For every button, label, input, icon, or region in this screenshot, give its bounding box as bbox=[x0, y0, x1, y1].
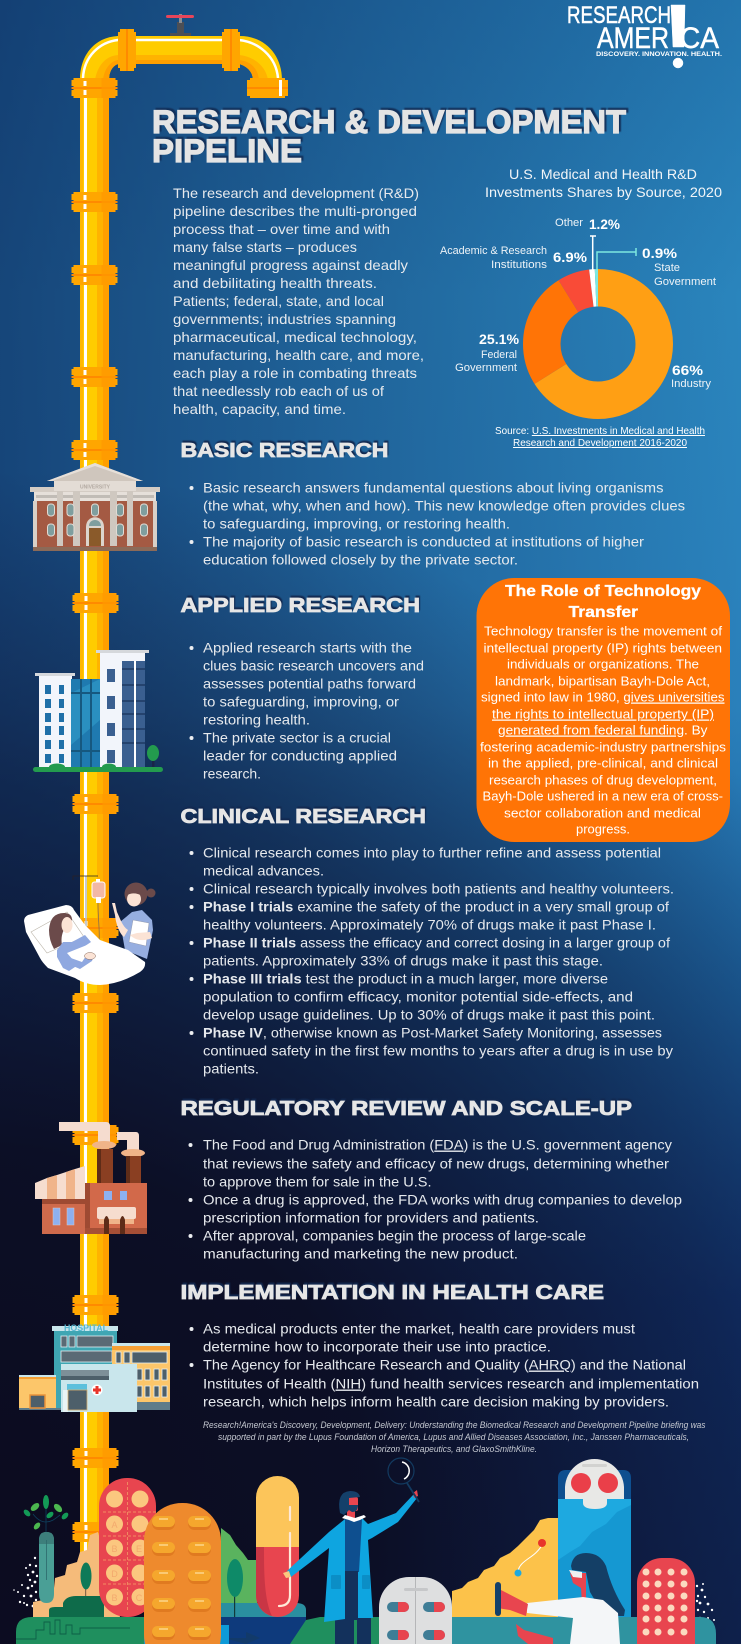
donut leader lines bbox=[590, 236, 636, 270]
teal ground right bbox=[452, 1617, 716, 1644]
donut chart bbox=[542, 288, 654, 400]
red right blister pack bbox=[637, 1558, 695, 1644]
footnote bbox=[203, 1420, 706, 1455]
clinical research text: patients. bbox=[203, 1060, 259, 1076]
applied research text: clues basic research uncovers and bbox=[203, 658, 424, 674]
regulatory text: The Food and Drug Administration ( FDA) is the U.S. government agency bbox=[203, 1136, 672, 1152]
blue pool and teal bank bbox=[144, 1528, 380, 1644]
donut labels: Academic & Research bbox=[440, 245, 547, 257]
implementation text: research, which helps inform health care decision making by providers. bbox=[203, 1394, 669, 1410]
callout: the role of technology transfer: in the applied, pre-clinical, and clinical bbox=[488, 756, 718, 770]
intro text: that needlessly rob each of us of bbox=[173, 383, 384, 399]
applied research text: to safeguarding, improving, or bbox=[203, 694, 399, 710]
donut labels: Institutions bbox=[491, 259, 548, 271]
applied research text: Applied research starts with the bbox=[203, 640, 412, 656]
regulatory text: that reviews the safety and efficacy of new drugs, determining whether bbox=[203, 1156, 669, 1172]
callout: the role of technology transfer: Technology transfer is the movement of bbox=[484, 624, 723, 638]
red blister pack: D bbox=[111, 1569, 118, 1579]
intro text: governments; industries spanning bbox=[173, 311, 396, 327]
donut labels: Other bbox=[555, 217, 583, 229]
clinical research text: Phase II trials assess the efficacy and correct dosing in a larger group of bbox=[203, 934, 670, 950]
chart source: Research and Development 2016-2020 bbox=[513, 438, 687, 449]
icon: university building bbox=[30, 463, 160, 551]
intro text: process that – over time and with bbox=[173, 221, 390, 237]
tree left bbox=[80, 1562, 92, 1617]
logo: DISCOVERY. INNOVATION. HEALTH. bbox=[596, 51, 722, 58]
applied research text: restoring health. bbox=[203, 712, 310, 728]
white blister pack bbox=[379, 1577, 452, 1644]
chart title: U.S. Medical and Health R&D bbox=[509, 166, 697, 182]
callout: the role of technology transfer: generated from federal funding . By bbox=[498, 724, 708, 738]
title bbox=[152, 104, 626, 169]
illustration: bottom medical scene bbox=[13, 1458, 716, 1644]
plant in test tube bbox=[22, 1495, 70, 1535]
red blister pack: C bbox=[136, 1593, 143, 1603]
yellow pipeline bbox=[72, 14, 288, 1558]
basic research text bbox=[190, 480, 685, 568]
basic research text: Basic research answers fundamental questions about living organisms bbox=[203, 480, 664, 496]
callout: the role of technology transfer: research phases of drug development, bbox=[489, 774, 717, 788]
donut labels: 66% bbox=[672, 362, 704, 378]
intro text: Patients; federal, state, and local bbox=[173, 293, 384, 309]
donut labels: Industry bbox=[671, 378, 711, 390]
title: RESEARCH & DEVELOPMENT bbox=[152, 104, 626, 140]
intro text: each play a role in combating threats bbox=[173, 365, 417, 381]
icon: hospital bbox=[19, 1323, 170, 1412]
applied research text: research. bbox=[203, 766, 261, 782]
implementation text: Institutes of Health ( NIH) fund health services research and implementation bbox=[203, 1376, 699, 1392]
basic research text: education followed closely by the private sector. bbox=[203, 552, 518, 568]
callout: the role of technology transfer: landmark, bipartisan Bayh-Dole Act, bbox=[495, 674, 710, 688]
callout: the role of technology transfer: the rights to intellectual property (IP) bbox=[492, 708, 714, 722]
callout: the role of technology transfer: Transfer bbox=[568, 604, 638, 621]
heading: regulatory review and scale-up: REGULATORY REVIEW AND SCALE-UP bbox=[180, 1098, 632, 1120]
speckle texture bbox=[13, 1557, 715, 1621]
footnote: Horizon Therapeutics, and GlaxoSmithKline. bbox=[371, 1444, 537, 1455]
icon: city buildings bbox=[33, 650, 163, 772]
regulatory text: Once a drug is approved, the FDA works with drug companies to develop bbox=[203, 1192, 682, 1208]
callout: the role of technology transfer: progress. bbox=[576, 822, 630, 836]
intro text: pipeline describes the multi-pronged bbox=[173, 203, 417, 219]
implementation text: determine how to incorporate their use into practice. bbox=[203, 1338, 551, 1354]
chart title: Investments Shares by Source, 2020 bbox=[485, 184, 722, 200]
basic research text: The majority of basic research is conducted at institutions of higher bbox=[203, 534, 644, 550]
pipe flanges bbox=[72, 29, 288, 1542]
intro text: and debilitating health threats. bbox=[173, 275, 377, 291]
orange blister pack bbox=[144, 1503, 221, 1644]
clinical research text: population to confirm efficacy, monitor potential side-effects, and bbox=[203, 988, 633, 1004]
clinical research text bbox=[190, 844, 674, 1076]
donut labels: Government bbox=[654, 276, 716, 288]
chart source bbox=[495, 426, 705, 449]
red blister pack bbox=[99, 1478, 156, 1617]
valve bbox=[166, 14, 194, 36]
male scientist bbox=[283, 1490, 418, 1644]
icon: hospital: HOSPITAL bbox=[64, 1323, 108, 1334]
icon: university building: UNIVERSITY bbox=[80, 484, 111, 490]
implementation text bbox=[190, 1320, 699, 1410]
callout: the role of technology transfer: signed into law in 1980, gives universities bbox=[481, 690, 724, 704]
test tube bbox=[39, 1532, 54, 1603]
donut labels: Government bbox=[455, 362, 517, 374]
regulatory text: manufacturing and marketing the new product. bbox=[203, 1246, 518, 1262]
red blister pack: E bbox=[136, 1544, 142, 1554]
donut labels: 25.1% bbox=[479, 331, 520, 347]
applied research text bbox=[190, 640, 424, 782]
green ground left bbox=[16, 1596, 230, 1644]
clinical research text: Phase I trials examine the safety of the product in a very small group of bbox=[203, 898, 669, 914]
callout: the role of technology transfer: sector collaboration and medical bbox=[504, 806, 701, 820]
logo: RESEARCH bbox=[567, 2, 671, 29]
clinical research text: medical advances. bbox=[203, 862, 324, 878]
magnifying glass bbox=[388, 1458, 419, 1502]
clinical research text: continued safety in the first few months to years after a drug is in use by bbox=[203, 1042, 673, 1058]
regulatory text: After approval, companies begin the process of large-scale bbox=[203, 1228, 586, 1244]
blue cabinet with skull capsule bbox=[558, 1459, 631, 1617]
callout: the role of technology transfer: fostering academic-industry partnerships bbox=[480, 740, 726, 754]
icon: patient and nurse bbox=[24, 876, 156, 985]
logo bbox=[567, 2, 722, 68]
clinical research text: develop usage guidelines. Up to 30% of drugs make it past this point. bbox=[203, 1006, 655, 1022]
donut labels: 6.9% bbox=[553, 249, 588, 265]
intro text: many false starts – produces bbox=[173, 239, 357, 255]
clinical research text: Clinical research typically involves both patients and healthy volunteers. bbox=[203, 880, 674, 896]
chart source: Source: U.S. Investments in Medical and Health bbox=[495, 426, 705, 437]
intro text: pharmaceutical, medical technology, bbox=[173, 329, 417, 345]
basic research text: (the what, why, when and how). This new knowledge often provides clues bbox=[203, 498, 685, 514]
footnote: supported in part by the Lupus Foundation of America, Lupus and Allied Diseases Association, Inc., Janssen Pharmaceuticals, bbox=[218, 1432, 689, 1443]
clinical research text: Phase III trials test the product in a much larger, more diverse bbox=[203, 970, 608, 986]
tree middle bbox=[227, 1559, 243, 1617]
heading: applied research: APPLIED RESEARCH bbox=[180, 595, 420, 617]
regulatory text: to approve them for sale in the U.S. bbox=[203, 1174, 432, 1190]
title: PIPELINE bbox=[152, 133, 302, 169]
icon: factory bbox=[35, 1122, 147, 1234]
intro text: The research and development (R&D) bbox=[173, 185, 419, 201]
chart title bbox=[485, 166, 722, 200]
clinical research text: Clinical research comes into play to further refine and assess potential bbox=[203, 844, 661, 860]
regulatory text bbox=[188, 1136, 682, 1262]
intro text: health, capacity, and time. bbox=[173, 401, 346, 417]
heading: implementation in health care: IMPLEMENTATION IN HEALTH CARE bbox=[180, 1282, 604, 1304]
callout: the role of technology transfer: The Role of Technology bbox=[505, 583, 701, 600]
intro text: meaningful progress against deadly bbox=[173, 257, 408, 273]
logo: AMER bbox=[597, 22, 669, 55]
red blister pack: A bbox=[111, 1520, 118, 1530]
red blister pack: B bbox=[111, 1544, 118, 1554]
implementation text: As medical products enter the market, health care providers must bbox=[203, 1320, 635, 1336]
intro text: manufacturing, health care, and more, bbox=[173, 347, 424, 363]
female scientist bbox=[495, 1553, 625, 1644]
basic research text: to safeguarding, improving, or restoring health. bbox=[203, 516, 510, 532]
clinical research text: patients. Approximately 33% of drugs make it past this stage. bbox=[203, 952, 603, 968]
tan stair hill bbox=[33, 1532, 120, 1617]
donut labels: 1.2% bbox=[589, 216, 621, 232]
applied research text: The private sector is a crucial bbox=[203, 730, 391, 746]
callout: the role of technology transfer: individuals or organizations. The bbox=[507, 658, 699, 672]
callout: the role of technology transfer: intellectual property (IP) rights between bbox=[484, 642, 722, 656]
donut labels bbox=[440, 216, 716, 390]
red blister pack: B bbox=[111, 1593, 118, 1603]
logo: CA bbox=[680, 22, 719, 55]
clinical research text: Phase IV, otherwise known as Post-Market Safety Monitoring, assesses bbox=[203, 1024, 662, 1040]
clinical research text: healthy volunteers. Approximately 70% of drugs make it past Phase I. bbox=[203, 916, 656, 932]
regulatory text: prescription information for providers and patients. bbox=[203, 1210, 539, 1226]
callout: the role of technology transfer bbox=[476, 578, 730, 842]
heading: clinical research: CLINICAL RESEARCH bbox=[180, 806, 426, 828]
implementation text: The Agency for Healthcare Research and Quality ( AHRQ) and the National bbox=[203, 1356, 686, 1372]
donut labels: 0.9% bbox=[642, 245, 678, 261]
yellow stair hill bbox=[452, 1518, 560, 1617]
heading: basic research: BASIC RESEARCH bbox=[180, 440, 388, 462]
callout: the role of technology transfer: Bayh-Dole ushered in a new era of cross- bbox=[482, 790, 723, 804]
large capsule bbox=[256, 1476, 299, 1617]
applied research text: assesses potential paths forward bbox=[203, 676, 416, 692]
applied research text: leader for conducting applied bbox=[203, 748, 397, 764]
donut labels: State bbox=[654, 262, 680, 274]
donut labels: Federal bbox=[481, 349, 517, 361]
intro text bbox=[173, 185, 424, 417]
